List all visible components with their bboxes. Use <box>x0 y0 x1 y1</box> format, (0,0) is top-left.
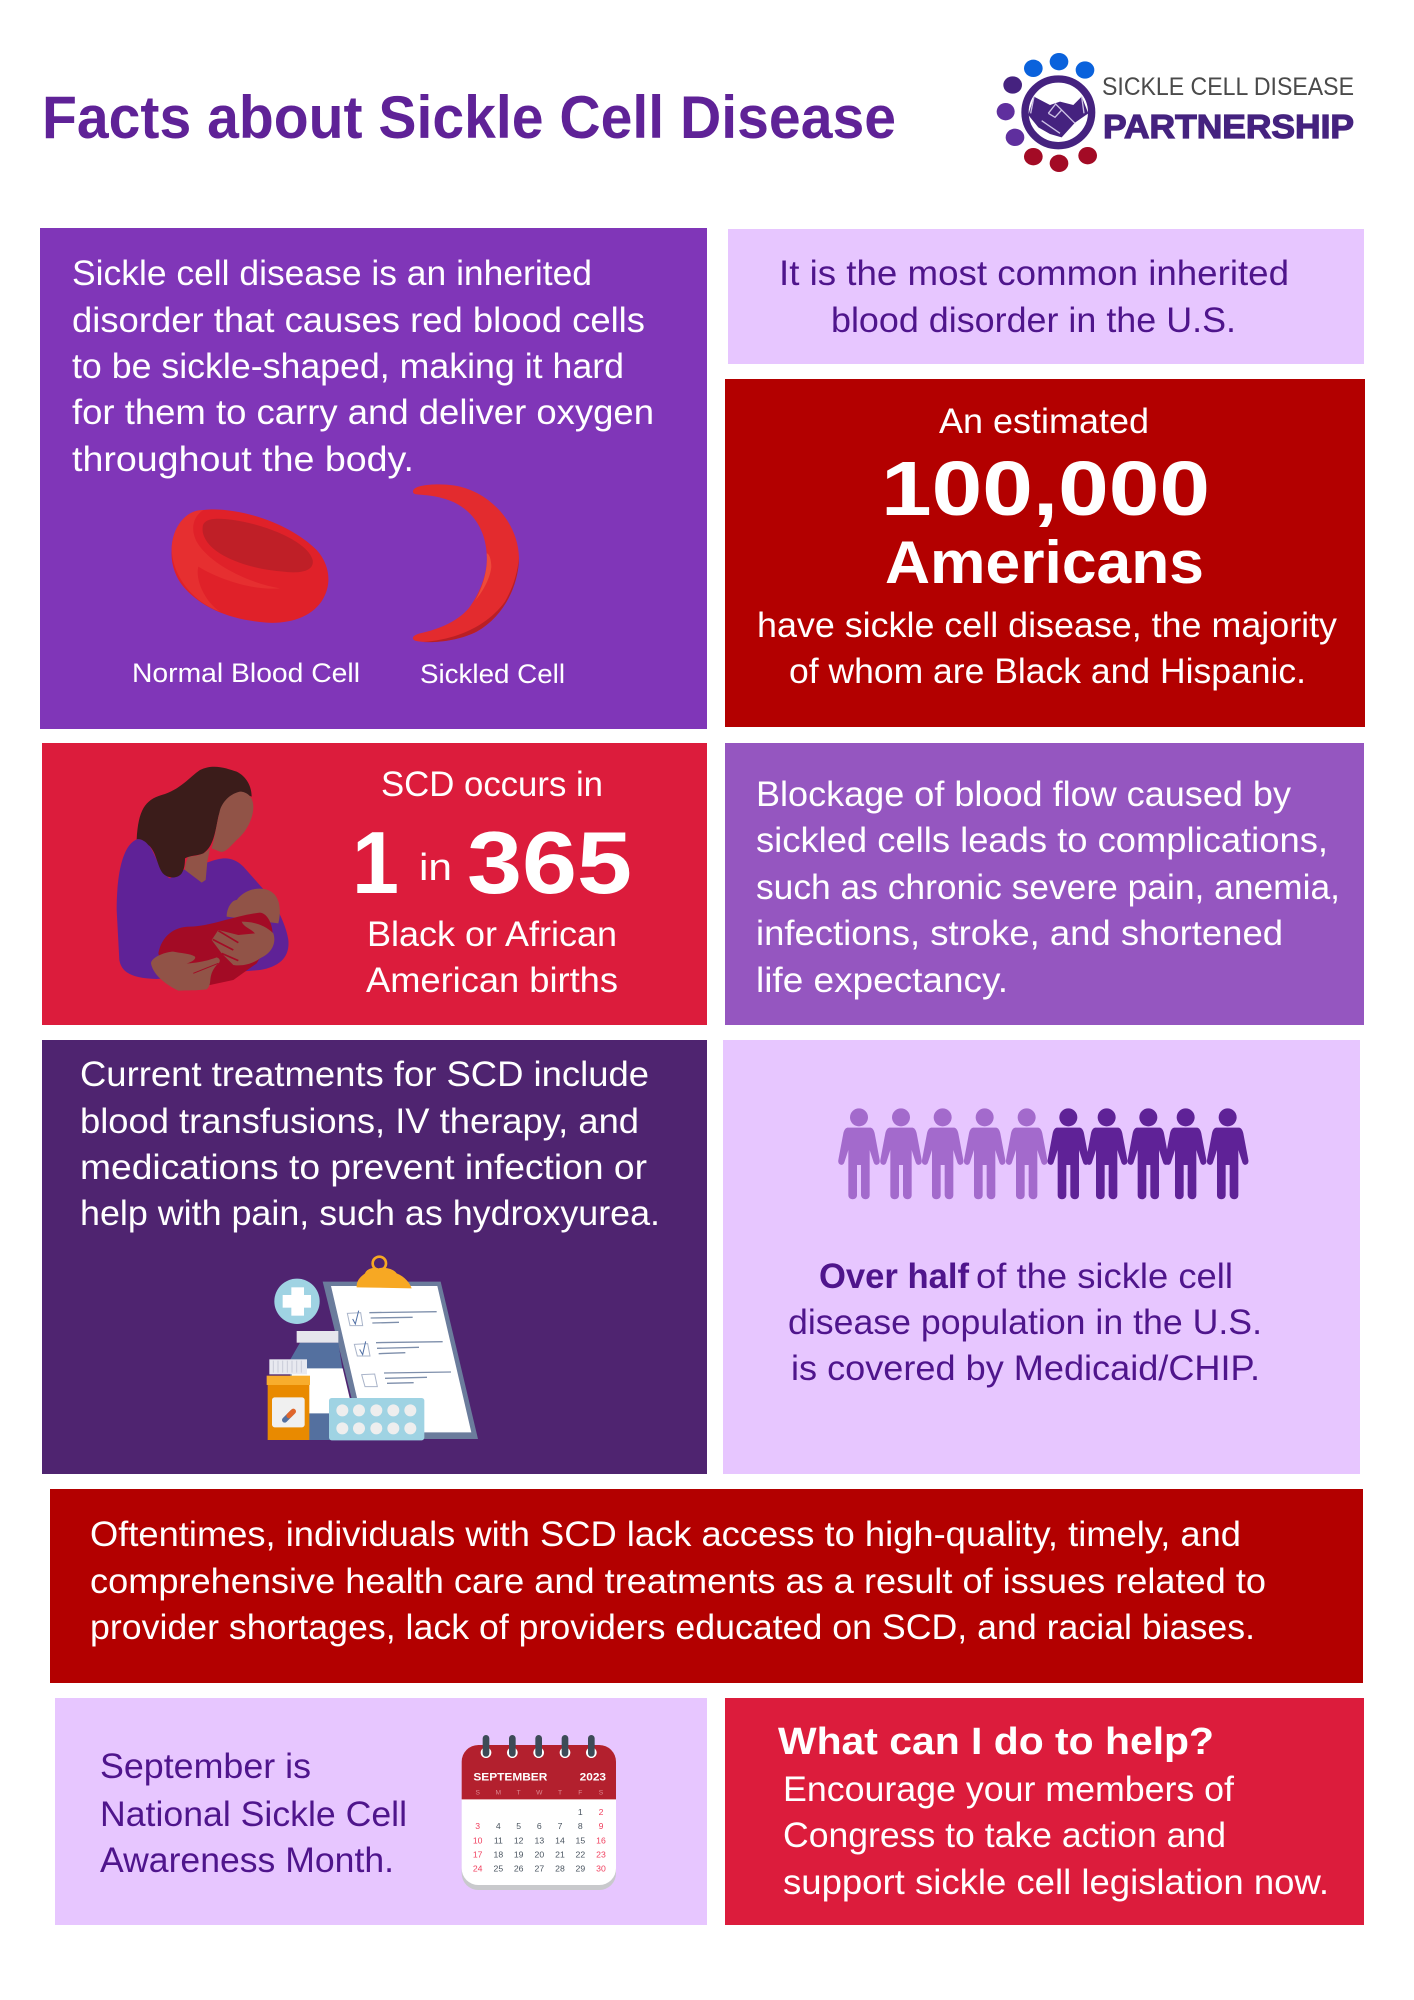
title: Facts about Sickle Cell Disease <box>42 84 896 151</box>
panel: complications: such as chronic severe pain, anemia, <box>756 868 1340 907</box>
panel: most common: It is the most common inherited <box>779 254 1289 293</box>
panel: treatments: Current treatments for SCD include <box>80 1055 649 1094</box>
text: over half: of the sickle cell <box>976 1257 1233 1296</box>
text: over half: is covered by Medicaid/CHIP. <box>791 1349 1260 1388</box>
panel: treatments <box>42 1040 707 1474</box>
icon: September 2023 calendar: SEPTEMBER <box>473 1772 547 1784</box>
logo: Sickle Cell Disease Partnership <box>997 53 1354 172</box>
text: definition: disorder that causes red blood cells <box>72 301 645 340</box>
panel: 1 in 365 births <box>42 743 707 1025</box>
text: definition: Sickle cell disease is an inherited <box>72 254 592 293</box>
icon: September 2023 calendar: 5 <box>516 1821 521 1831</box>
icon: September 2023 calendar: 19 <box>514 1849 524 1859</box>
icon: September 2023 calendar: 20 <box>535 1849 544 1859</box>
panel: access to care: provider shortages, lack of providers educated on SCD, and racial biases. <box>90 1608 1255 1647</box>
stat: 1 in 365: 1 <box>352 813 399 912</box>
stat: 100,000 Americans: 100,000 <box>881 446 1210 532</box>
panel: treatments: help with pain, such as hydroxyurea. <box>80 1194 660 1233</box>
text: call to action: Encourage your members of <box>783 1770 1234 1809</box>
panel: 100,000 Americans: have sickle cell disease, the majority <box>757 606 1338 645</box>
icon: mother holding baby <box>117 767 289 991</box>
panel: most common: blood disorder in the U.S. <box>831 301 1236 340</box>
text: over half: Over half <box>819 1257 969 1296</box>
panel: awareness month: Awareness Month. <box>100 1841 394 1880</box>
panel: complications: Blockage of blood flow caused by <box>756 775 1292 814</box>
icon: September 2023 calendar: 8 <box>578 1821 583 1831</box>
icon: September 2023 calendar: 22 <box>576 1849 585 1859</box>
stat: 1 in 365: in <box>419 847 452 889</box>
panel: 100,000 Americans: An estimated <box>939 402 1149 441</box>
stat: 1 in 365 <box>352 813 632 912</box>
panel: what is sickle cell disease <box>40 228 707 729</box>
icon: September 2023 calendar: 6 <box>537 1821 542 1831</box>
label: sickled cell: Sickled Cell <box>420 659 565 689</box>
icon: September 2023 calendar: 2 <box>599 1807 604 1817</box>
panel: complications: infections, stroke, and shortened <box>756 914 1283 953</box>
text: over half: disease population in the U.S. <box>788 1303 1262 1342</box>
panel: treatments: medications to prevent infection or <box>80 1148 647 1187</box>
stat: 1 in 365: 365 <box>467 813 632 912</box>
panel: access to care: Oftentimes, individuals with SCD lack access to high-quality, timely, and <box>90 1515 1241 1554</box>
icon: September 2023 calendar: 15 <box>576 1835 585 1845</box>
icon: September 2023 calendar: T <box>517 1790 521 1797</box>
label: normal blood cell: Normal Blood Cell <box>132 658 360 688</box>
icon: September 2023 calendar: W <box>536 1790 543 1797</box>
panel: most common <box>728 229 1364 364</box>
stat: 100,000 Americans: Americans <box>885 529 1204 596</box>
icon: September 2023 calendar: 7 <box>558 1821 563 1831</box>
text: call to action <box>783 1770 1329 1902</box>
panel: awareness month: National Sickle Cell <box>100 1795 407 1834</box>
icon: September 2023 calendar: 3 <box>475 1821 480 1831</box>
icon: September 2023 calendar: 12 <box>514 1835 524 1845</box>
icon: circle of dots with handshake <box>997 53 1097 172</box>
text: definition: for them to carry and deliver oxygen <box>72 393 654 432</box>
panel: Medicaid coverage <box>723 1040 1360 1474</box>
icon: ten people pictogram <box>838 1108 1248 1199</box>
icon: September 2023 calendar: 29 <box>576 1863 585 1873</box>
icon: clipboard and medicine <box>267 1257 478 1440</box>
icon: September 2023 calendar: F <box>578 1790 582 1797</box>
text: definition <box>72 254 654 479</box>
panel: complications: sickled cells leads to complications, <box>756 821 1328 860</box>
heading: what can I do: What can I do to help? <box>778 1721 1214 1763</box>
icon: September 2023 calendar: 14 <box>555 1835 565 1845</box>
icon: September 2023 calendar: 4 <box>496 1821 501 1831</box>
icon: sickled cell <box>413 484 519 642</box>
logo: Sickle Cell Disease Partnership: PARTNERSHIP <box>1103 108 1354 145</box>
panel: access to care: comprehensive health care and treatments as a result of issues related to <box>90 1562 1266 1601</box>
icon: September 2023 calendar: 13 <box>535 1835 544 1845</box>
text: over half <box>788 1257 1262 1388</box>
panel: what can I do to help <box>725 1698 1364 1925</box>
icon: September 2023 calendar: 2023 <box>580 1772 606 1784</box>
icon: September 2023 calendar: 18 <box>494 1849 503 1859</box>
icon: September 2023 calendar: 23 <box>596 1849 606 1859</box>
icon: September 2023 calendar: 17 <box>473 1849 483 1859</box>
icon: September 2023 calendar: 26 <box>514 1863 524 1873</box>
panel: awareness month: September is <box>100 1747 311 1786</box>
icon: September 2023 calendar: M <box>496 1790 501 1797</box>
panel: awareness month <box>55 1698 707 1925</box>
icon: September 2023 calendar <box>462 1738 616 1890</box>
icon: September 2023 calendar: 1 <box>578 1807 583 1817</box>
icon: September 2023 calendar: S <box>599 1790 604 1797</box>
icon: September 2023 calendar: 16 <box>596 1835 606 1845</box>
text: definition: throughout the body. <box>72 440 414 479</box>
text: definition: to be sickle-shaped, making it hard <box>72 347 624 386</box>
icon: September 2023 calendar: 30 <box>596 1863 606 1873</box>
icon: September 2023 calendar: 27 <box>535 1863 544 1873</box>
icon: September 2023 calendar: 25 <box>494 1863 503 1873</box>
panel: 1 in 365 births: Black or African <box>367 915 617 954</box>
icon: September 2023 calendar: 9 <box>599 1821 604 1831</box>
icon: September 2023 calendar: 10 <box>473 1835 483 1845</box>
text: call to action: Congress to take action and <box>783 1816 1226 1855</box>
icon: September 2023 calendar: S <box>475 1790 480 1797</box>
panel: complications: life expectancy. <box>756 961 1008 1000</box>
icon: normal blood cell <box>172 509 328 623</box>
panel: 100,000 Americans: of whom are Black and Hispanic. <box>789 652 1306 691</box>
icon: September 2023 calendar: 21 <box>555 1849 565 1859</box>
text: call to action: support sickle cell legislation now. <box>783 1863 1329 1902</box>
panel: 1 in 365 births: SCD occurs in <box>381 765 603 804</box>
logo: Sickle Cell Disease Partnership: SICKLE CELL DISEASE <box>1102 73 1354 101</box>
icon: September 2023 calendar: 11 <box>494 1835 503 1845</box>
icon: September 2023 calendar: 28 <box>555 1863 565 1873</box>
panel: complications <box>725 743 1364 1025</box>
stat: 100,000 Americans <box>881 446 1210 596</box>
panel: 100,000 Americans <box>725 379 1365 727</box>
panel: access to care <box>50 1489 1363 1683</box>
icon: September 2023 calendar: 24 <box>473 1863 483 1873</box>
icon: September 2023 calendar: T <box>558 1790 562 1797</box>
panel: treatments: blood transfusions, IV therapy, and <box>80 1102 639 1141</box>
panel: 1 in 365 births: American births <box>366 961 618 1000</box>
